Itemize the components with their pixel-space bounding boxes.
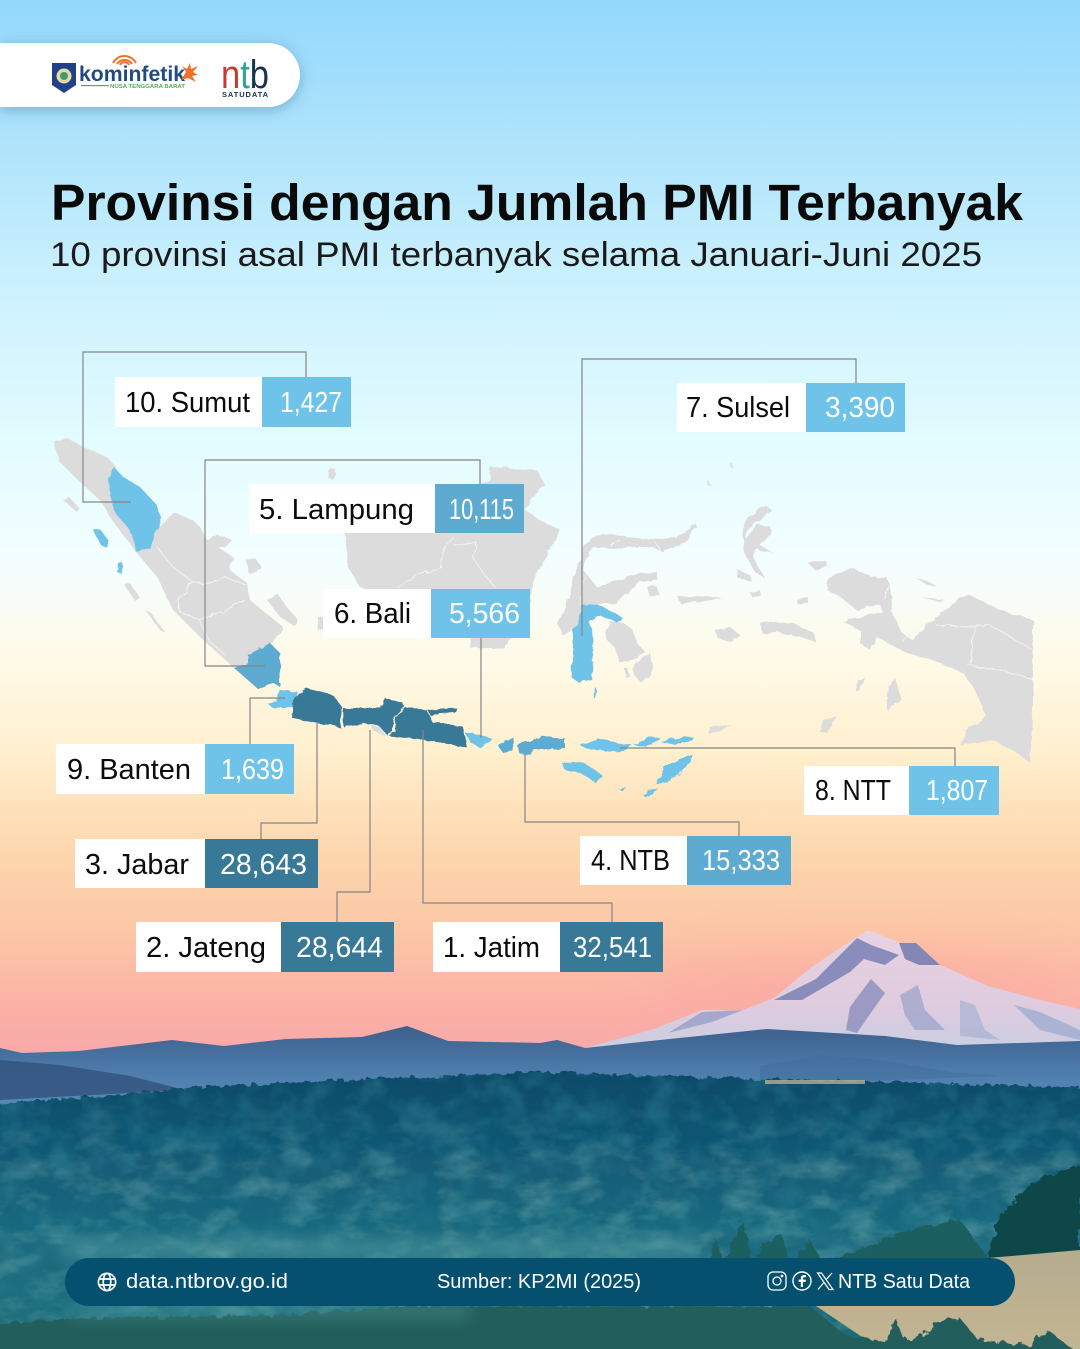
map: Jawa Tengah province, dark blue [343, 698, 404, 735]
map: Sulsel province, light blue [571, 603, 622, 698]
logo: provincial emblem [52, 63, 76, 93]
label: 4 NTB: 4. NTB [591, 845, 670, 877]
logo: orange deer [181, 63, 198, 82]
map: grey provinces [53, 438, 1033, 763]
connector: Sumut [83, 352, 306, 502]
logo: Nusa Tenggara Barat caption: NUSA TENGGARA BARAT [110, 84, 186, 90]
label: 8 NTT [804, 766, 999, 815]
background: distant blue ridges [0, 1026, 1080, 1110]
label: 9 Banten [56, 744, 294, 794]
connector: Jabar [261, 722, 317, 839]
map: NTT province, light blue [562, 737, 693, 797]
subtitle: 10 provinsi asal PMI terbanyak selama Januari-Juni 2025 [50, 236, 982, 274]
header pill with logos [0, 43, 300, 107]
label: 9 Banten: 1,639 [221, 754, 284, 786]
map: Yogyakarta, grey [370, 724, 386, 736]
connector: Banten [250, 698, 285, 744]
map: Jawa Barat province, dark blue [292, 688, 342, 727]
map: Banten province, light blue [267, 690, 298, 708]
connector: Jatim [423, 730, 612, 922]
label: 2 Jateng: 28,644 [296, 932, 383, 964]
icon: globe [98, 1273, 116, 1291]
label: 9 Banten: 9. Banten [67, 754, 191, 786]
label: 6 Bali [323, 589, 530, 638]
map: province boundaries [157, 537, 1033, 680]
background: snow-capped mountain [585, 930, 1080, 1060]
label: 8 NTT: 8. NTT [815, 775, 891, 807]
footer: source: Sumber: KP2MI (2025) [437, 1271, 641, 1293]
icon: facebook [793, 1272, 811, 1290]
label: 5 Lampung: 5. Lampung [259, 494, 414, 526]
label: 10 Sumut: 10. Sumut [125, 387, 250, 419]
label: 10 Sumut [115, 377, 351, 427]
map: Jawa Timur province, dark blue [389, 707, 467, 748]
label: 7 Sulsel: 3,390 [825, 392, 895, 424]
label: 2 Jateng: 2. Jateng [146, 932, 266, 964]
map: Sulawesi south-east arm [605, 622, 645, 663]
background: mist around the footer [60, 1240, 700, 1316]
label: 4 NTB [580, 836, 791, 885]
label: 1 Jatim: 1. Jatim [443, 932, 540, 964]
connector: NTT [620, 748, 955, 766]
map: Bali province, light blue [465, 733, 492, 748]
logo: Kominfotik wordmark: kominfetik [79, 63, 185, 86]
map: NTB province, medium blue [498, 735, 565, 755]
label: 1 Jatim: 32,541 [573, 932, 652, 964]
title: Provinsi dengan Jumlah PMI Terbanyak [51, 174, 1024, 231]
logo: ntb wordmark: ntb [221, 53, 269, 97]
logo: Kominfotik wifi arcs [113, 56, 136, 65]
logo: Satu Data caption: SATUDATA [222, 90, 269, 99]
connector: NTB [525, 755, 739, 836]
label: 8 NTT: 1,807 [926, 775, 988, 807]
label: 7 Sulsel [677, 383, 905, 432]
background: field [816, 1250, 1080, 1349]
label: 3 Jabar: 3. Jabar [85, 849, 189, 881]
background: pink glow behind the mountain [640, 955, 1080, 1015]
label: 1 Jatim [433, 922, 663, 972]
footer bar [65, 1258, 1015, 1306]
label: 6 Bali: 5,566 [449, 598, 520, 630]
label: 6 Bali: 6. Bali [334, 598, 411, 630]
footer: website: data.ntbrov.go.id [126, 1271, 288, 1293]
connector: Jateng [337, 730, 370, 922]
logo: green underline [81, 85, 109, 86]
label: 10 Sumut: 1,427 [280, 387, 342, 419]
background: forested hills [0, 1070, 1080, 1349]
map: Lampung province, medium blue [233, 643, 280, 688]
label: 2 Jateng [136, 922, 394, 972]
connector: Sulsel [582, 359, 856, 636]
map: Sumut province, light blue [93, 468, 161, 573]
label: 3 Jabar [75, 839, 318, 888]
label: 4 NTB: 15,333 [702, 845, 780, 877]
label: 7 Sulsel: 7. Sulsel [686, 392, 790, 424]
label: 5 Lampung [249, 484, 524, 533]
footer: social handle: NTB Satu Data [838, 1271, 971, 1293]
connector: Bali [480, 638, 482, 738]
background: foreground trees [0, 1220, 1080, 1349]
connector: Lampung [205, 460, 480, 666]
map: Sulawesi north and central [558, 523, 697, 635]
label: 5 Lampung: 10,115 [449, 494, 514, 526]
label: 3 Jabar: 28,643 [220, 849, 307, 881]
icon: X [818, 1273, 833, 1290]
icon: instagram [768, 1272, 786, 1290]
map of Indonesia [53, 438, 1033, 797]
